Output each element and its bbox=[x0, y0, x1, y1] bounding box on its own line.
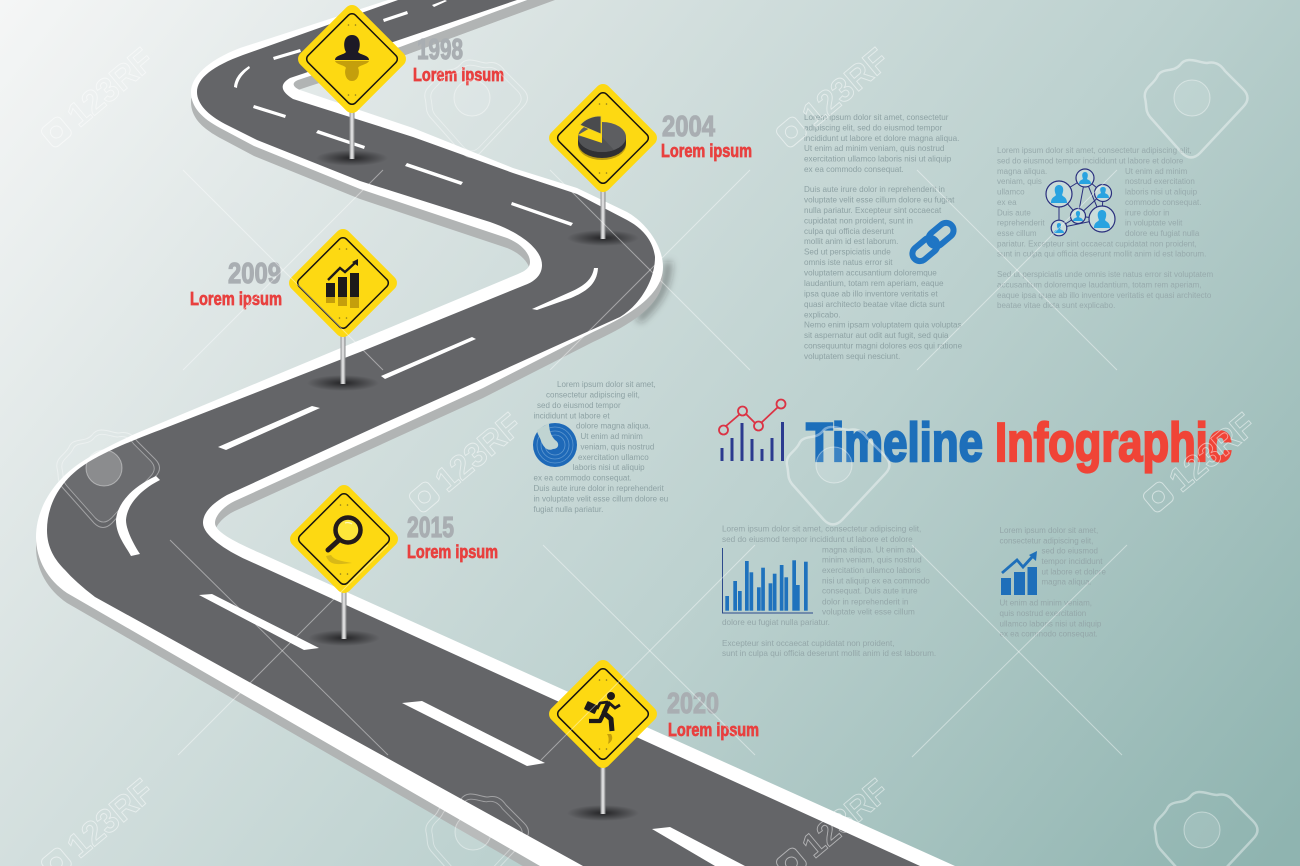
text block: upper right: dolore eu fugiat nulla bbox=[1125, 229, 1200, 238]
text block: centre left: sed do eiusmod tempor bbox=[537, 401, 621, 410]
timeline marker 1998 bbox=[295, 2, 504, 166]
text block: upper right: ex ea bbox=[997, 198, 1017, 207]
year 2004: 2004 bbox=[662, 111, 715, 143]
year 1998: 1998 bbox=[417, 34, 463, 66]
text block: upper right: magna aliqua. bbox=[997, 167, 1047, 176]
timeline marker 2009 bbox=[190, 226, 400, 391]
sign 2009 bbox=[286, 226, 400, 340]
icon: chain link bbox=[909, 220, 957, 264]
road bbox=[36, 0, 955, 866]
text block: centre left: in voluptate velit esse cillum dolore eu bbox=[534, 494, 668, 503]
text block: upper right: laboris nisi ut aliquip bbox=[1125, 188, 1198, 196]
icon: magnifier bbox=[326, 518, 360, 564]
icon: circular chart bbox=[533, 423, 577, 467]
text block: lower right: Ut enim ad minim veniam, bbox=[1000, 598, 1092, 607]
text block: centre left: Ut enim ad minim bbox=[580, 432, 643, 441]
text block: upper right: nostrud exercitation bbox=[1125, 177, 1195, 186]
icon: bar chart with arrow bbox=[326, 259, 359, 308]
text block: upper middle: voluptatem accusantium doloremque bbox=[804, 268, 937, 278]
icon: line and bar title chart bbox=[719, 400, 786, 461]
text block: upper middle: adipiscing elit, sed do eiusmod tempor bbox=[804, 123, 942, 132]
text block: upper right: esse cillum bbox=[997, 229, 1037, 238]
icon: running man bbox=[584, 692, 620, 744]
text block: lower middle: nisi ut aliquip ex ea commodo bbox=[822, 576, 930, 585]
label 1998: Lorem ipsum bbox=[413, 65, 504, 85]
text block: lower middle bbox=[722, 524, 936, 658]
text block: centre left: dolore magna aliqua. bbox=[576, 422, 651, 431]
text block: upper right: accusantium doloremque laudantium, totam rem aperiam, bbox=[997, 280, 1202, 289]
text block: upper middle: exercitation ullamco laboris nisi ut aliquip bbox=[804, 155, 952, 164]
text block: centre left bbox=[534, 380, 668, 514]
text block: upper right: sed do eiusmod tempor incididunt ut labore et dolore bbox=[997, 156, 1184, 165]
text block: centre left: incididunt ut labore et bbox=[534, 411, 610, 420]
year 2020: 2020 bbox=[667, 688, 719, 720]
text block: upper right: Ut enim ad minim bbox=[1125, 167, 1188, 176]
sign 2020 bbox=[546, 657, 660, 771]
watermark: logos: 123RF bbox=[1162, 406, 1263, 499]
year 2009: 2009 bbox=[228, 258, 281, 290]
icon: pie chart bbox=[578, 116, 626, 160]
text block: lower right: quis nostrud exercitation bbox=[1000, 609, 1086, 618]
text block: lower right: Lorem ipsum dolor sit amet, bbox=[1000, 526, 1098, 535]
text block: upper right: irure dolor in bbox=[1125, 208, 1169, 217]
text block: upper right: ullamco bbox=[997, 188, 1025, 196]
text block: lower right bbox=[1000, 526, 1107, 639]
watermark: logos: 123RF bbox=[60, 772, 161, 865]
text block: upper middle: ex ea commodo consequat. bbox=[804, 165, 904, 174]
text block: upper middle: culpa qui officia deserunt bbox=[804, 227, 894, 236]
text block: centre left: ex ea commodo consequat. bbox=[534, 474, 632, 483]
text block: lower middle: sed do eiusmod tempor incididunt ut labore et dolore bbox=[722, 535, 913, 544]
text block: lower middle: Excepteur sint occaecat cupidatat non proident, bbox=[722, 639, 895, 648]
text block: lower middle: minim veniam, quis nostrud bbox=[822, 556, 922, 565]
text block: upper right: eaque ipsa quae ab illo inventore veritatis et quasi architecto bbox=[997, 291, 1212, 300]
title: Timeline bbox=[806, 411, 983, 473]
text block: upper middle: quasi architecto beatae vitae dicta sunt bbox=[804, 300, 945, 309]
text block: upper middle: Nemo enim ipsam voluptatem quia voluptas bbox=[804, 321, 962, 330]
text block: upper right: Lorem ipsum dolor sit amet, consectetur adipiscing elit, bbox=[997, 146, 1192, 155]
text block: lower right: ex ea commodo consequat. bbox=[1000, 630, 1098, 639]
bar chart bbox=[722, 548, 813, 613]
text block: upper right: in voluptate velit bbox=[1125, 219, 1183, 228]
watermark: logos: 123RF bbox=[795, 772, 896, 865]
text block: upper middle: nulla pariatur. Excepteur sint occaecat bbox=[804, 206, 942, 215]
text block: upper right: veniam, quis bbox=[997, 177, 1042, 186]
text block: centre left: laboris nisi ut aliquip bbox=[573, 463, 645, 472]
text block: lower middle: Lorem ipsum dolor sit amet, consectetur adipiscing elit, bbox=[722, 524, 921, 534]
text block: upper right: Duis aute bbox=[997, 208, 1031, 217]
text block: upper right: commodo consequat. bbox=[1125, 198, 1202, 207]
text block: upper middle: mollit anim id est laborum. bbox=[804, 237, 898, 246]
text block: upper right: reprehenderit bbox=[997, 219, 1045, 228]
icon: growth bars bbox=[1001, 551, 1037, 595]
text block: lower middle: exercitation ullamco laboris bbox=[822, 566, 921, 575]
sign 2015 bbox=[287, 482, 401, 596]
text block: upper middle: cupidatat non proident, sunt in bbox=[804, 216, 913, 225]
text block: lower right: consectetur adipiscing elit, bbox=[1000, 536, 1093, 545]
label 2004: Lorem ipsum bbox=[661, 141, 752, 161]
text block: lower middle: dolor in reprehenderit in bbox=[822, 597, 909, 606]
text block: upper middle: voluptatem sequi nesciunt. bbox=[804, 352, 900, 361]
text block: lower middle: voluptate velit esse cillum bbox=[822, 608, 915, 617]
text block: upper middle: Lorem ipsum dolor sit amet, consectetur bbox=[804, 113, 949, 122]
text block: upper middle: Sed ut perspiciatis unde bbox=[804, 248, 891, 257]
text block: lower middle: magna aliqua. Ut enim ad bbox=[822, 545, 916, 554]
text block: upper middle: voluptate velit esse cillum dolore eu fugiat bbox=[804, 195, 955, 204]
text block: centre left: Lorem ipsum dolor sit amet, bbox=[557, 380, 656, 389]
timeline marker 2015 bbox=[287, 482, 498, 646]
text block: upper middle: Duis aute irure dolor in reprehenderit in bbox=[804, 185, 945, 194]
watermark: logos: 123RF bbox=[60, 41, 161, 134]
timeline marker 2004 bbox=[546, 81, 752, 246]
text block: lower right: ullamco laboris nisi ut aliquip bbox=[1000, 619, 1102, 628]
text block: upper right: sunt in culpa qui officia deserunt mollit anim id est laborum. bbox=[997, 250, 1206, 259]
text block: lower middle: sunt in culpa qui officia deserunt mollit anim id est laborum. bbox=[722, 649, 936, 658]
text block: upper middle: consequuntur magni dolores eos qui ratione bbox=[804, 342, 963, 351]
label 2020: Lorem ipsum bbox=[668, 720, 759, 740]
text block: upper middle bbox=[804, 113, 963, 361]
text block: upper right: pariatur. Excepteur sint occaecat cupidatat non proident, bbox=[997, 239, 1197, 248]
text block: upper right: beatae vitae dicta sunt explicabo. bbox=[997, 301, 1115, 310]
text block: upper middle: ipsa quae ab illo inventore veritatis et bbox=[804, 289, 938, 298]
title: Infographic bbox=[995, 411, 1232, 473]
text block: upper middle: laudantium, totam rem aperiam, eaque bbox=[804, 279, 944, 288]
icon: people network bbox=[1046, 169, 1115, 236]
text block: centre left: Duis aute irure dolor in reprehenderit bbox=[534, 484, 665, 493]
text block: upper middle: Ut enim ad minim veniam, quis nostrud bbox=[804, 144, 944, 153]
text block: centre left: exercitation ullamco bbox=[578, 453, 649, 462]
text block: upper middle: sit aspernatur aut odit aut fugit, sed quia bbox=[804, 331, 949, 340]
text block: lower middle: dolore eu fugiat nulla pariatur. bbox=[722, 618, 830, 627]
text block: upper middle: incididunt ut labore et dolore magna aliqua. bbox=[804, 134, 959, 143]
year 2015: 2015 bbox=[407, 512, 454, 544]
label 2015: Lorem ipsum bbox=[407, 542, 498, 562]
text block: centre left: consectetur adipiscing elit, bbox=[546, 390, 640, 400]
text block: centre left: fugiat nulla pariatur. bbox=[534, 505, 603, 514]
text block: lower middle: consequat. Duis aute irure bbox=[822, 587, 918, 596]
text block: lower right: tempor incididunt bbox=[1042, 557, 1103, 566]
watermark: logos: 123RF bbox=[795, 41, 896, 134]
text block: lower right: sed do eiusmod bbox=[1042, 547, 1098, 556]
sign 2004 bbox=[546, 81, 660, 195]
text block: upper middle: omnis iste natus error sit bbox=[804, 258, 893, 267]
title bbox=[806, 411, 1232, 473]
text block: lower right: ut labore et dolore bbox=[1042, 567, 1107, 576]
text block: lower right: magna aliqua. bbox=[1042, 578, 1092, 587]
text block: upper right bbox=[997, 146, 1213, 310]
watermark: logos: 123RF bbox=[428, 406, 529, 499]
timeline marker 2020 bbox=[546, 657, 759, 821]
text block: upper middle: explicabo. bbox=[804, 310, 841, 319]
text block: centre left: veniam, quis nostrud bbox=[580, 442, 654, 452]
label 2009: Lorem ipsum bbox=[190, 289, 282, 309]
text block: upper right: Sed ut perspiciatis unde omnis iste natus error sit voluptatem bbox=[997, 270, 1213, 279]
sign 1998 bbox=[295, 2, 409, 116]
